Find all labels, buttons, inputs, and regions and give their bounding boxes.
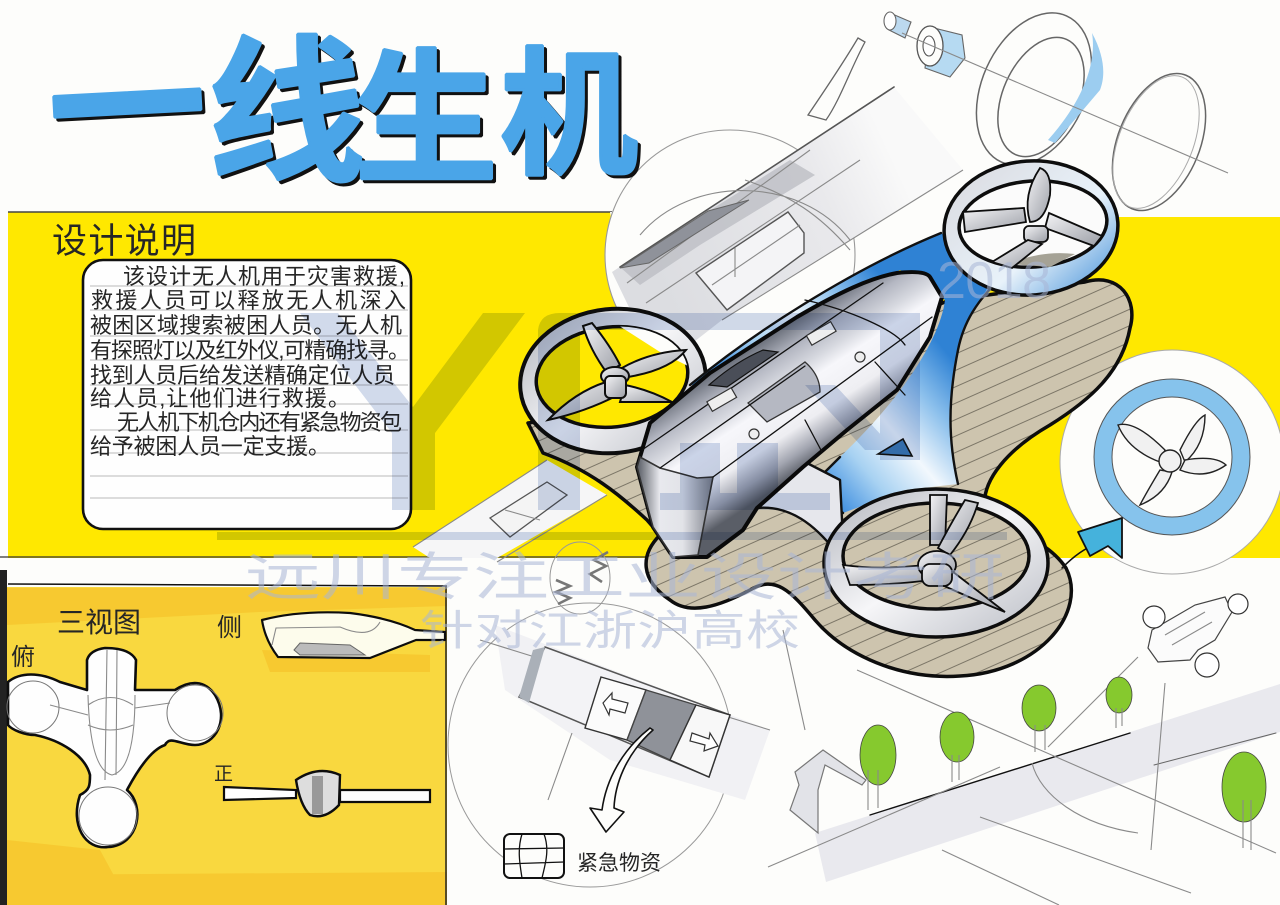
left rotor — [518, 306, 708, 456]
label: front view: 正 — [214, 764, 233, 785]
arrow to detail view — [1062, 518, 1122, 568]
body text: 给人员,让他们进行救援。 — [90, 386, 350, 411]
tube window 1 — [620, 200, 749, 268]
body text: 救援人员可以释放无人机深入 — [91, 288, 406, 313]
tube window 2 — [696, 212, 804, 310]
tree 4 — [1106, 677, 1132, 728]
label: emergency supplies: 紧急物资 — [577, 852, 661, 875]
emergency supplies detail — [448, 603, 805, 887]
heading: three views: 三视图 — [57, 607, 141, 638]
house sketch — [790, 750, 866, 833]
tree 3 — [1022, 685, 1056, 752]
curved release arrow — [590, 728, 653, 832]
body contour lines — [642, 283, 932, 477]
ground shadow of drone — [528, 280, 1132, 676]
body text: 无人机下机仓内还有紧急物资包 — [117, 410, 402, 435]
tree 5 — [1222, 752, 1266, 850]
road scene — [768, 594, 1280, 905]
top view drawing — [7, 648, 223, 847]
front face — [637, 457, 713, 557]
background sketch: large pencil circle and tube — [413, 87, 963, 562]
watermark year: 2018 — [937, 252, 1051, 310]
upper-right rotor — [940, 155, 1122, 301]
side view drawing — [262, 612, 445, 658]
watermark line 1: 远川专注工业设计考研 — [245, 548, 1005, 606]
lower body skirt — [757, 462, 843, 552]
parts: exploded top-right sketch — [808, 0, 1228, 224]
icon: triangle vent on frame — [878, 439, 912, 456]
cargo hatch — [519, 647, 730, 777]
icon: right arrow — [690, 733, 718, 751]
side panel — [748, 362, 820, 422]
icon: left arrow — [603, 693, 628, 715]
drone main body — [637, 272, 942, 557]
body text: 被困区域搜索被困人员。无人机 — [90, 313, 402, 338]
title: 生 — [354, 40, 498, 201]
label: side view: 侧 — [217, 614, 242, 642]
detail: blue fan circle — [1094, 379, 1250, 535]
small bushing — [884, 12, 911, 38]
road tube with small part — [413, 460, 607, 562]
watermark text — [245, 252, 1051, 655]
panel: design description — [52, 222, 411, 529]
body text — [90, 264, 410, 459]
ruled text box — [83, 260, 411, 529]
body text: 有探照灯以及红外仪,可精确找寻。 — [90, 338, 410, 363]
blue frame — [690, 233, 1008, 513]
dark cockpit window — [709, 350, 778, 387]
white circle behind detail view — [1060, 350, 1280, 574]
heading: design description: 设计说明 — [52, 222, 196, 261]
curved shell part — [808, 38, 865, 120]
title: 线 — [208, 27, 365, 202]
pencil gear sketch — [550, 542, 610, 614]
icon: supply package — [504, 834, 564, 878]
watermark line 2: 针对江浙沪高校 — [420, 608, 800, 655]
title: 一 — [44, 19, 211, 203]
front rotor — [824, 489, 1048, 637]
body text: 找到人员后给发送精确定位人员 — [90, 363, 395, 388]
watermark: large logo shapes — [217, 313, 1007, 540]
tree 2 — [940, 712, 974, 782]
panel: three views — [0, 570, 447, 905]
title: 机 — [500, 39, 638, 193]
hatch latch 1 — [707, 388, 737, 411]
body text: 该设计无人机用于灾害救援, — [123, 264, 405, 289]
tree 1 — [860, 725, 896, 810]
label: top view: 俯 — [11, 644, 35, 671]
mini drone sketch — [1143, 594, 1248, 677]
body text: 给予被困人员一定支援。 — [90, 434, 330, 459]
panel: yellow design band — [0, 212, 1280, 558]
front view drawing — [224, 771, 430, 816]
hatch latch 2 — [806, 322, 836, 345]
nut part — [917, 26, 965, 77]
icon: left rotor blades — [548, 323, 686, 420]
title — [44, 19, 638, 203]
